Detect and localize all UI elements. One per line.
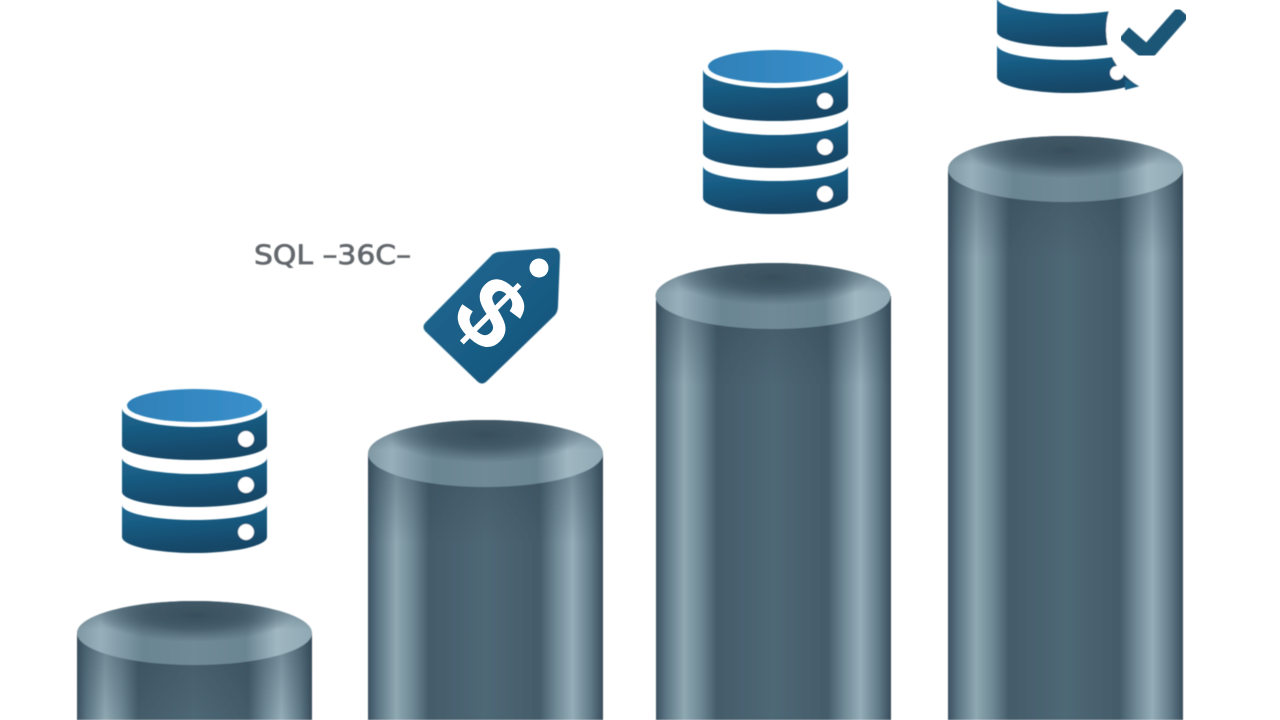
cylinder bar 1 xyxy=(77,601,312,720)
cylinder bar 2 xyxy=(368,420,603,720)
icon: database with check badge xyxy=(997,0,1234,94)
cylinder bar 3 xyxy=(656,263,891,720)
icon: check mark xyxy=(1124,12,1183,53)
icon: database 1 xyxy=(122,389,267,553)
icon: database 2 xyxy=(703,50,848,214)
cylinder bar 4 xyxy=(948,136,1183,720)
icon: price tag with dollar sign: $ xyxy=(432,254,550,372)
text label: SQL –36C– xyxy=(254,240,411,271)
